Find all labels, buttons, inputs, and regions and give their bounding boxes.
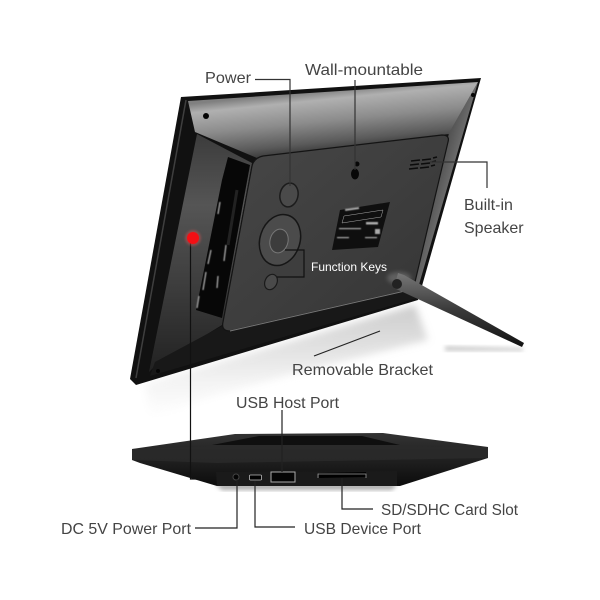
line: power [255,80,290,186]
card slot [318,472,366,478]
rating label [332,202,390,250]
line: USB device [255,481,295,527]
line: DC port [195,479,237,528]
line: USB host [281,410,283,472]
label: Built-in Speaker: Speaker [464,220,524,237]
bottom view of photo frame [132,433,488,490]
label: Built-in Speaker: Built-in [464,197,513,214]
label: Removable Bracket: Removable Bracket [292,362,434,379]
line: DC power [190,243,197,479]
label: DC 5V Power Port: DC 5V Power Port [61,521,192,538]
table shadow [145,305,523,418]
label: USB Device Port: USB Device Port [304,521,422,538]
label: USB Host Port: USB Host Port [236,395,340,412]
label: SD/SDHC Card Slot: SD/SDHC Card Slot [381,502,519,519]
screen bevel [212,436,400,445]
label: Function Keys: Function Keys [311,260,387,274]
bottom shadow [215,484,398,490]
power button [278,181,300,209]
red marker dot [185,230,201,246]
direction pad buttons [253,209,307,271]
frame edge [132,433,488,486]
mini USB port [250,475,262,480]
side port recess [196,157,250,318]
line: speaker [430,162,487,188]
DC jack [233,474,239,480]
port strip [216,471,397,486]
small key [262,272,280,292]
removable bracket [387,272,524,347]
leader lines [190,80,487,528]
screw holes [156,93,475,373]
speaker grille [409,157,437,169]
label: Wall-mountable: Wall-mountable [305,62,423,79]
keyhole mount [351,162,360,180]
rear view of photo frame [130,78,524,418]
USB host port [271,472,295,482]
line: function keys [277,250,304,277]
line: SD card [342,478,373,509]
frame body [130,78,481,385]
rear control panel [223,135,448,331]
label: Power: Power [205,70,252,87]
line: bracket [314,331,380,356]
line: wall-mountable [354,80,356,170]
